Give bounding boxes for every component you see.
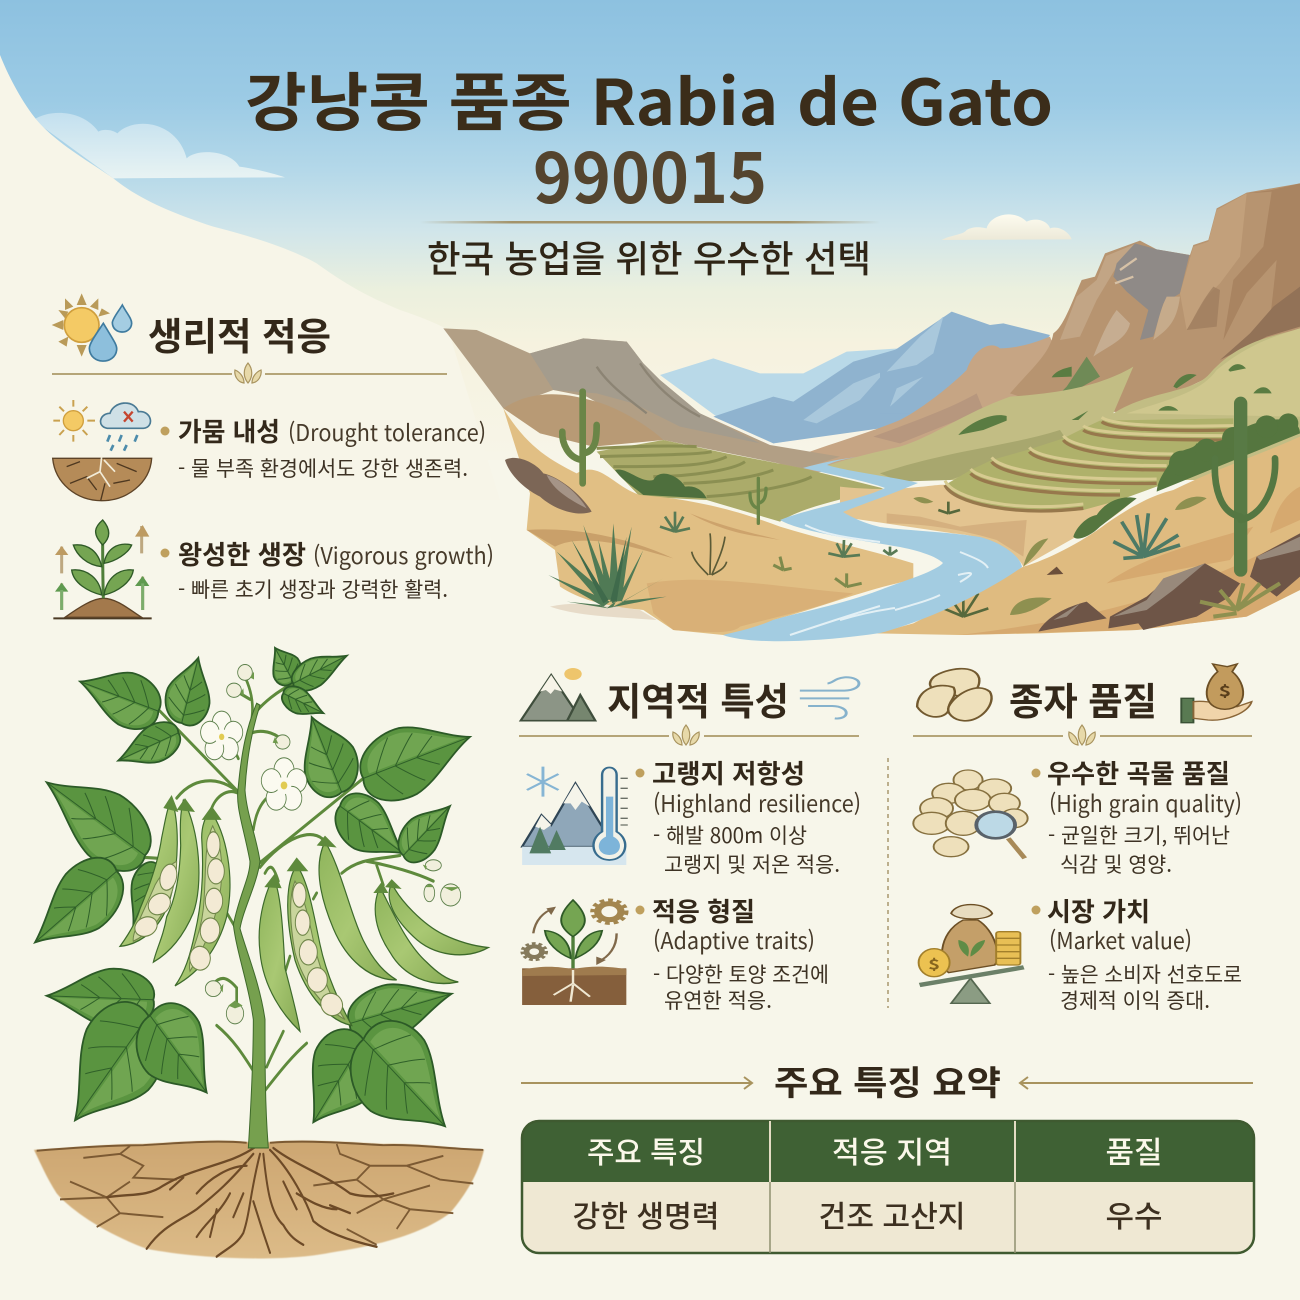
feature subtitle: (Vigorous growth)	[313, 537, 494, 571]
feature subtitle: (Market value)	[1049, 922, 1192, 956]
title divider	[420, 221, 880, 224]
section divider	[519, 725, 859, 745]
icon: adaptive traits	[522, 900, 626, 1005]
arrow: left of summary heading	[521, 1077, 752, 1089]
feature title: vigorous growth: 왕성한 생장	[178, 535, 306, 572]
icon: sun and water drops	[52, 293, 132, 361]
cloud right	[942, 214, 1072, 240]
bullet	[160, 426, 170, 436]
column divider	[887, 758, 889, 1008]
icon: market value scale: $	[928, 954, 940, 974]
bullet	[1032, 906, 1040, 914]
section divider	[913, 725, 1252, 745]
table row: 강한 생명력	[572, 1192, 720, 1236]
feature title: drought tolerance: 가뭄 내성	[178, 412, 280, 449]
feature description: - 균일한 크기, 뛰어난	[1048, 820, 1230, 850]
bullet	[636, 768, 644, 778]
open pod interiors and seeds	[133, 826, 345, 1019]
feature title: adaptive traits: 적응 형질	[652, 892, 755, 929]
icon: market value scale	[919, 905, 1024, 1003]
table row	[572, 1192, 1162, 1236]
river	[723, 457, 1022, 641]
table row: 우수	[1106, 1192, 1162, 1236]
panel: seed quality	[913, 664, 1252, 1015]
summary heading: 주요 특징 요약	[774, 1056, 1001, 1105]
feature description line 2: 고랭지 및 저온 적응.	[664, 849, 840, 879]
arrow: right of summary heading	[1020, 1077, 1253, 1089]
panel: regional characteristics	[519, 668, 861, 1015]
icon: grain quality with magnifier	[913, 770, 1028, 858]
feature description: - 해발 800m 이상	[653, 820, 807, 850]
icon: mountains and wind	[521, 668, 859, 721]
pods	[120, 798, 488, 1031]
feature description: - 물 부족 환경에서도 강한 생존력.	[178, 453, 468, 483]
table header: 적응 지역	[832, 1128, 952, 1172]
feature subtitle: (High grain quality)	[1049, 785, 1242, 819]
right cliffs and slopes	[773, 183, 1300, 482]
stems	[117, 674, 433, 1093]
feature description: - 다양한 토양 조건에	[653, 959, 829, 989]
landscape illustration	[443, 183, 1300, 641]
table header: 주요 특징	[587, 1128, 705, 1172]
page background	[0, 460, 1300, 1300]
soil cracks	[37, 1142, 483, 1245]
title: 강낭콩 품종 Rabia de Gato	[245, 53, 1053, 144]
subtitle: 한국 농업을 위한 우수한 선택	[427, 229, 871, 283]
feature title: highland resilience: 고랭지 저항성	[652, 754, 805, 791]
icon: highland thermometer	[522, 767, 628, 865]
section divider	[52, 363, 447, 383]
table header: 품질	[1106, 1128, 1162, 1172]
feature description line 2: 식감 및 영양.	[1060, 849, 1172, 879]
left green terraces	[597, 440, 883, 522]
table header	[587, 1128, 1162, 1172]
cloud left	[33, 113, 285, 178]
bullet	[160, 548, 170, 558]
feature subtitle: (Drought tolerance)	[288, 414, 486, 448]
feature subtitle: (Highland resilience)	[653, 785, 861, 819]
title number: 990015	[533, 123, 767, 223]
bullet	[636, 906, 644, 914]
far mountains	[660, 348, 940, 443]
pod caps	[163, 795, 402, 893]
middle and right sandy banks	[840, 403, 1300, 635]
icon: beans and money	[917, 664, 1252, 723]
summary table	[522, 1121, 1254, 1253]
feature title: grain quality: 우수한 곡물 품질	[1047, 754, 1230, 791]
feature title: market value: 시장 가치	[1047, 892, 1150, 929]
heading: 생리적 적응	[148, 306, 331, 361]
icon: beans and money: $	[1219, 681, 1231, 701]
panel: physiological adaptation	[52, 293, 494, 618]
heading: 종자 품질	[1009, 671, 1157, 726]
leaves	[18, 639, 479, 1162]
table row: 건조 고산지	[818, 1192, 966, 1236]
feature subtitle: (Adaptive traits)	[653, 922, 815, 956]
heading: 지역적 특성	[607, 671, 789, 726]
bullet	[1032, 768, 1040, 778]
icon: drought	[53, 400, 152, 501]
soil	[34, 1141, 484, 1258]
bean plant illustration	[18, 639, 488, 1258]
river highlights	[790, 525, 988, 635]
cream hill behind left panel	[0, 55, 500, 500]
left rocky mountain	[443, 328, 840, 468]
left sandy bank	[503, 392, 913, 635]
feature description: - 빠른 초기 생장과 강력한 활력.	[178, 574, 448, 604]
feature description line 2: 유연한 적응.	[664, 985, 772, 1015]
bud calyxes	[220, 672, 460, 1008]
sky background	[0, 0, 1300, 460]
roots	[107, 1146, 393, 1257]
feature description: - 높은 소비자 선호도로	[1048, 959, 1242, 989]
flowers	[198, 665, 461, 1024]
feature description line 2: 경제적 이익 증대.	[1060, 985, 1210, 1015]
icon: growing sprout	[53, 520, 152, 618]
